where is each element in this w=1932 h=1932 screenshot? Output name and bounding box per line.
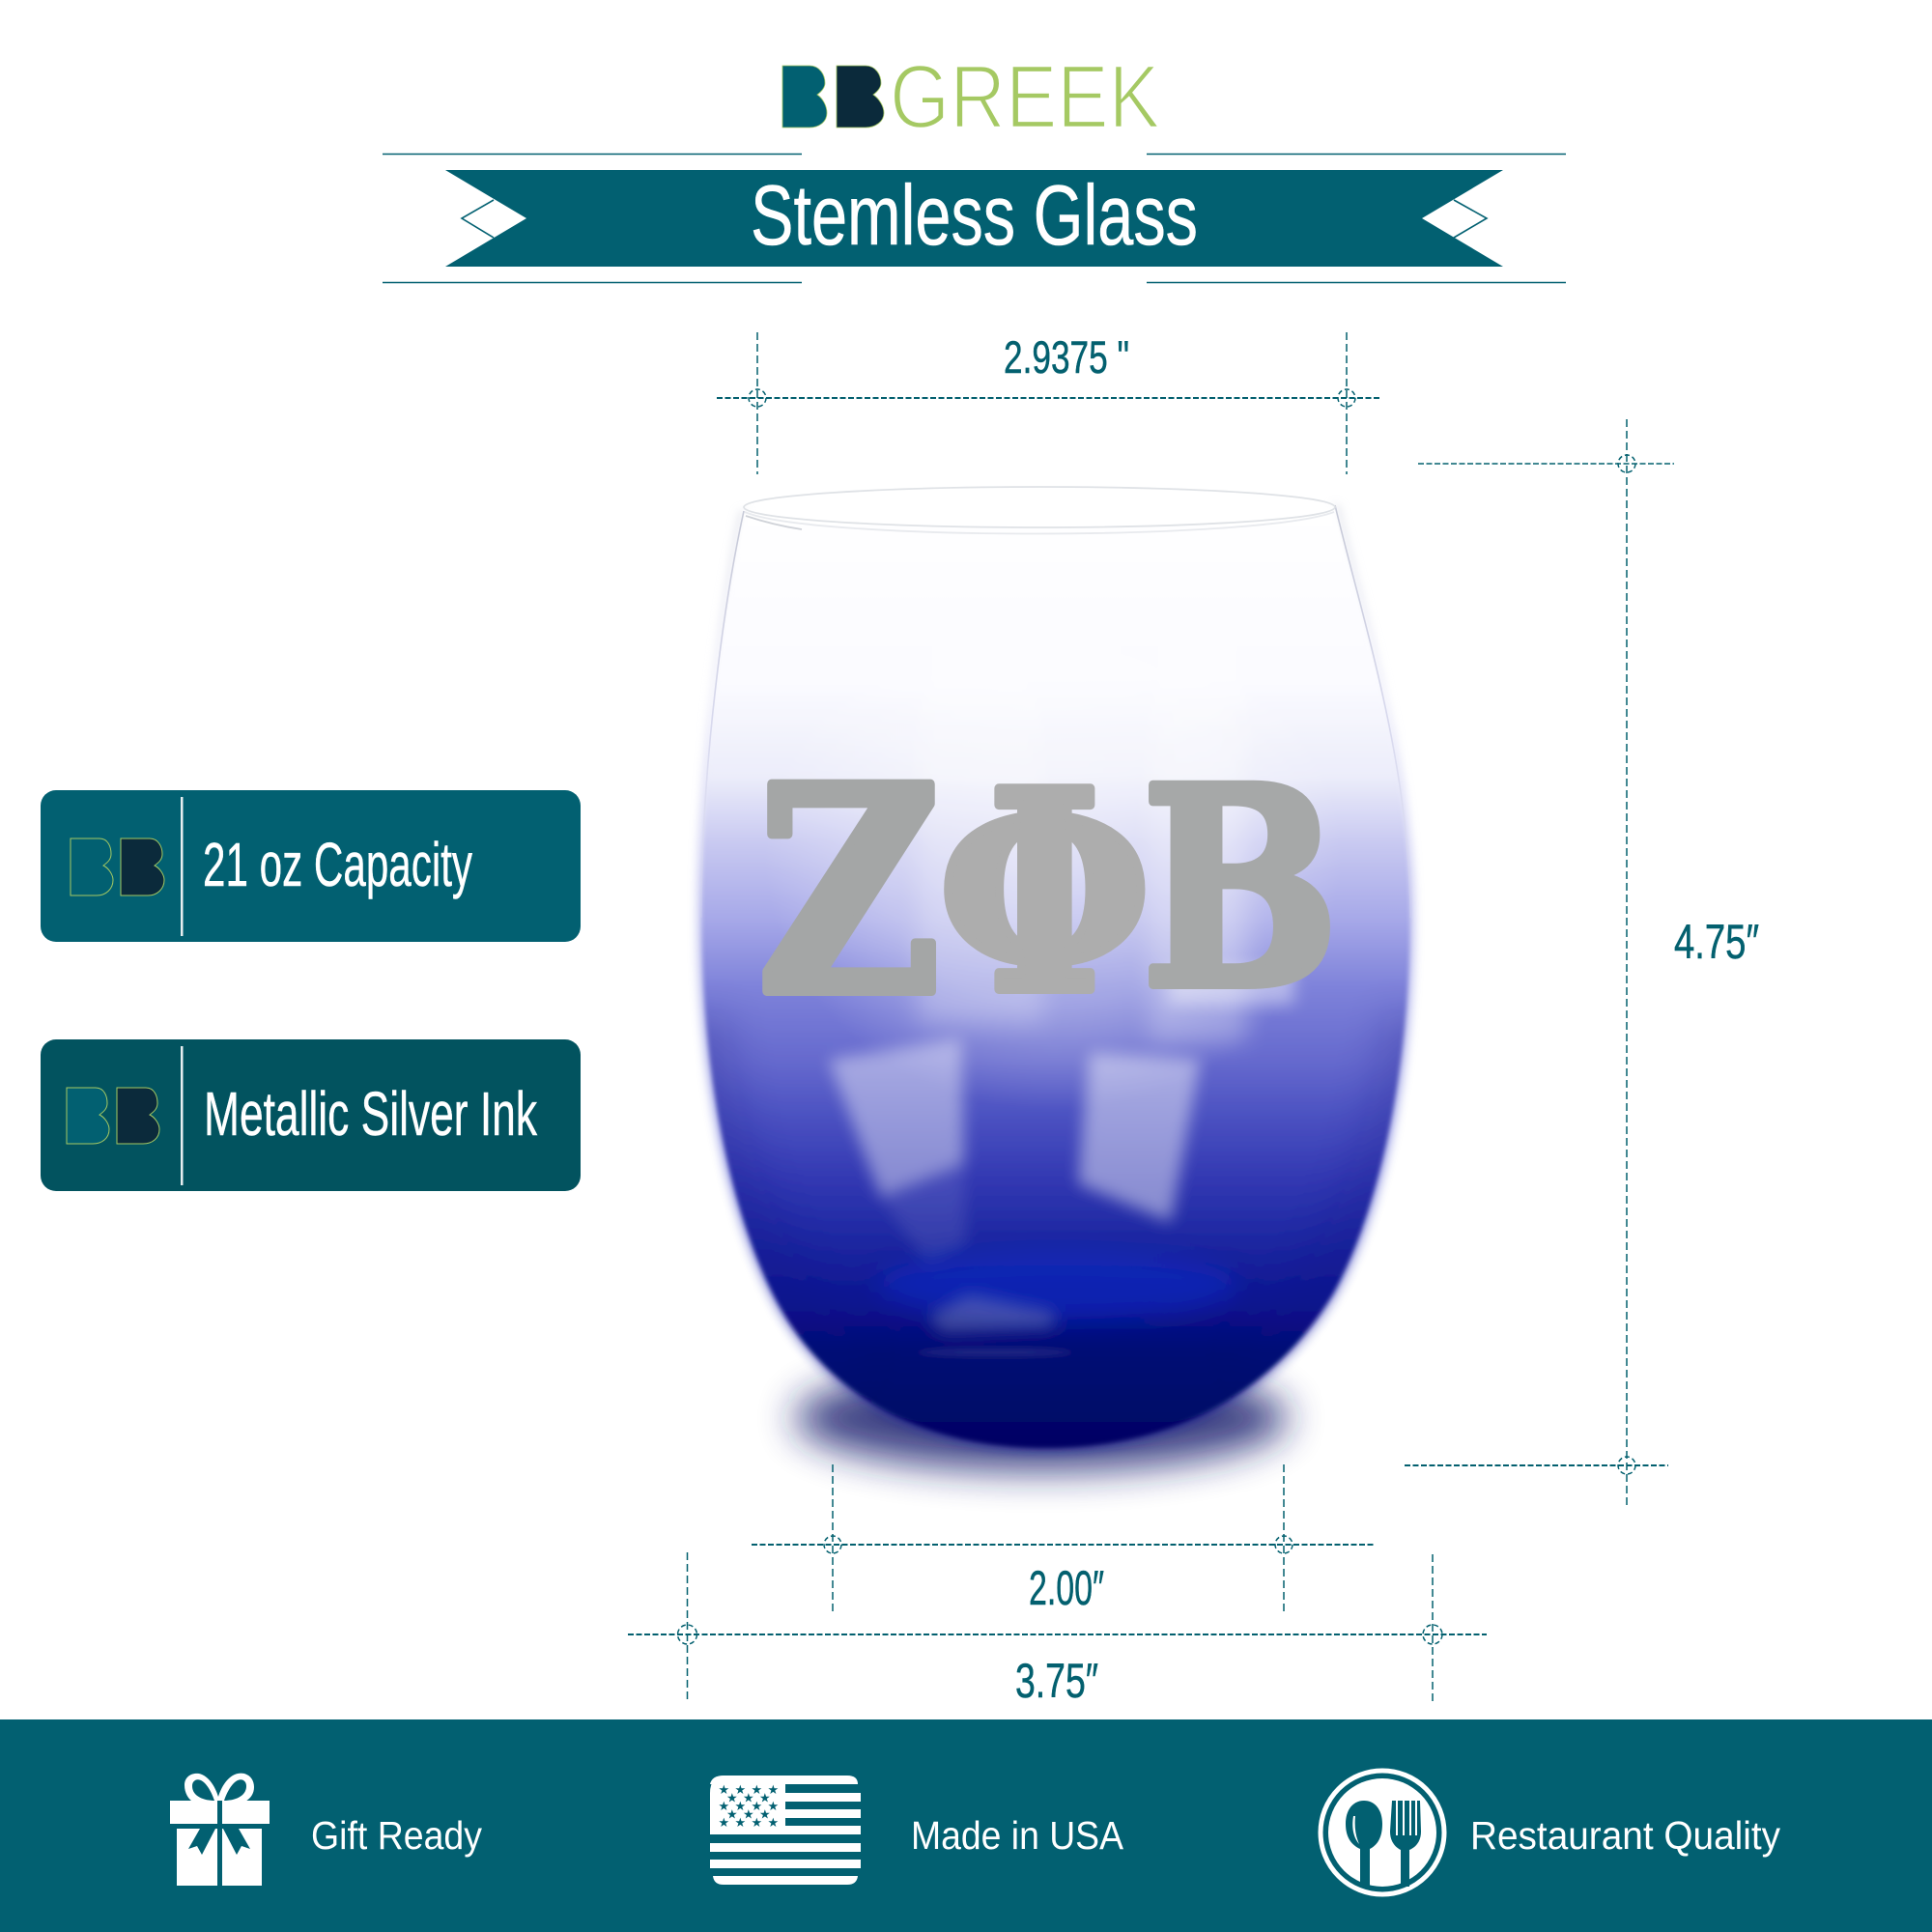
label: gift ready: Gift Ready xyxy=(311,1813,482,1858)
dimension lines xyxy=(1405,419,1674,1506)
title rules xyxy=(383,155,1566,282)
footer background xyxy=(0,1719,1932,1932)
panel background xyxy=(41,790,581,942)
letter beta: B xyxy=(1142,727,1339,1049)
label: Metallic Silver Ink xyxy=(204,1079,538,1149)
logo xyxy=(782,46,1160,147)
dimension: height xyxy=(1405,419,1759,1506)
dimension value: 2.00″ xyxy=(1029,1561,1104,1615)
icon: BB mark xyxy=(67,1088,159,1144)
label: 21 oz Capacity xyxy=(203,830,472,899)
icon: usa flag: ★★★ xyxy=(726,1808,771,1822)
glass xyxy=(676,473,1439,1459)
dimension: top width xyxy=(717,331,1381,474)
base glow xyxy=(879,1250,1236,1320)
icon: usa flag: ★★★ xyxy=(726,1791,771,1806)
divider xyxy=(181,797,184,936)
icon: gift xyxy=(170,1774,270,1886)
glass shadow xyxy=(795,1366,1288,1470)
dimension value: 3.75″ xyxy=(1015,1654,1098,1708)
left reflection xyxy=(829,1038,964,1198)
dimension: base width xyxy=(752,1464,1375,1615)
glass body xyxy=(699,510,1412,1451)
footer band xyxy=(0,1719,1932,1932)
icon: usa flag: ★★★★ xyxy=(719,1816,779,1831)
dimension lines xyxy=(628,1552,1487,1704)
glass soft halo xyxy=(701,505,1410,1448)
dimension value: 2.9375 " xyxy=(1004,331,1129,383)
icon: restaurant plate xyxy=(1321,1771,1444,1894)
ribbon left diamond xyxy=(462,200,494,238)
base reflection xyxy=(927,1294,1055,1333)
logo: first B xyxy=(782,66,827,128)
glass rim xyxy=(744,487,1335,533)
glass outline upper xyxy=(701,505,1410,918)
title ribbon xyxy=(445,167,1503,267)
title text: Stemless Glass xyxy=(751,167,1198,263)
panel: ink xyxy=(41,1039,581,1191)
icon: usa flag xyxy=(710,1776,861,1885)
dimension lines xyxy=(717,332,1381,474)
letter zeta: Z xyxy=(757,725,941,1059)
dimension value: 4.75″ xyxy=(1674,915,1759,969)
upper vertical light bands xyxy=(913,859,1047,1030)
lower edge darkening xyxy=(701,1014,1410,1372)
icon: usa flag: ★★★★ xyxy=(719,1800,779,1814)
dimension lines xyxy=(752,1464,1375,1612)
icon: BB mark xyxy=(71,838,164,895)
label: restaurant quality: Restaurant Quality xyxy=(1470,1813,1780,1858)
dimension: full width xyxy=(628,1552,1487,1708)
label: made in usa: Made in USA xyxy=(911,1813,1124,1858)
greek letters xyxy=(757,725,1339,1059)
panel background xyxy=(41,1039,581,1191)
right reflection xyxy=(1078,1053,1200,1222)
icon: usa flag: ★★★★ xyxy=(719,1783,779,1798)
letter phi: Φ xyxy=(938,731,1151,1055)
divider xyxy=(181,1046,184,1185)
ribbon right diamond xyxy=(1454,200,1487,238)
logo: second B xyxy=(837,66,884,128)
logo: wordmark: GREEK xyxy=(890,46,1160,147)
ribbon shape xyxy=(445,170,1503,267)
centre lightening xyxy=(808,779,1296,1095)
panel: capacity xyxy=(41,790,581,942)
